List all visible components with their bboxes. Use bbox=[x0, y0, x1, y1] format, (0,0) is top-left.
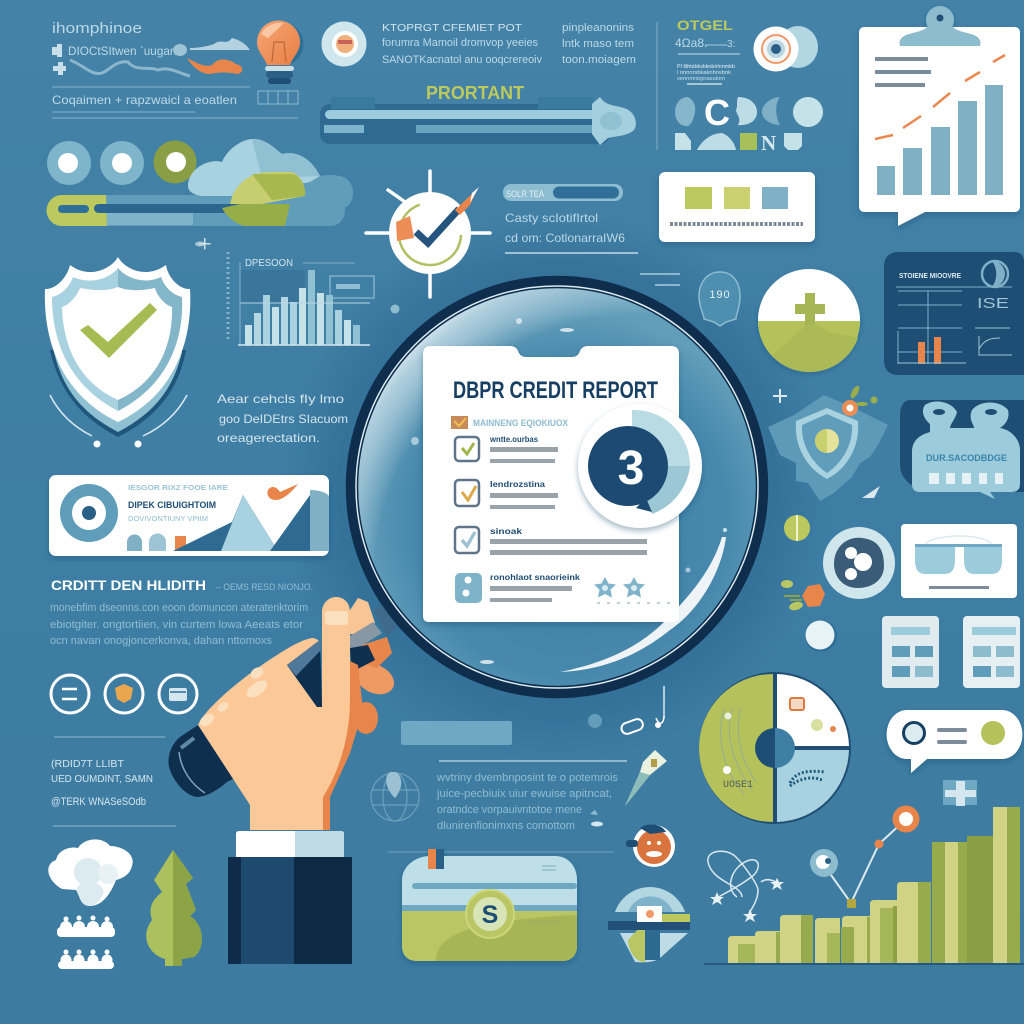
fingernail and knuckles bbox=[198, 611, 348, 729]
small trinket icons bbox=[588, 686, 664, 735]
icon: calculator right bbox=[963, 616, 1020, 688]
panel: small stat column: l nnnnrsbkaknhnsbnk bbox=[677, 70, 731, 76]
heading: PRORTANT: PRORTANT bbox=[426, 83, 524, 103]
text block: shield note: goo DeIDEtrs SIacuom bbox=[219, 412, 348, 426]
text block: lower paragraph: juice-pecbiuix uiur ewuise apitncat, bbox=[436, 788, 612, 800]
subtitle with icon: MAINNENG EQIOKIUOX bbox=[473, 418, 569, 429]
checklist item 3: sinoak bbox=[490, 526, 522, 536]
subtitle with icon bbox=[451, 416, 569, 429]
heading and paragraph: credit health: ocn navan onogjoncerkonva, dahan nttomoxs bbox=[50, 635, 272, 647]
panel: small stat column: sennmnkgnaeuiom bbox=[677, 76, 725, 82]
text block: top center: pinpleanonins bbox=[562, 22, 635, 34]
note rectangle bbox=[401, 721, 512, 745]
heading and paragraph: credit health bbox=[50, 578, 313, 647]
icon: target with blob bbox=[754, 26, 818, 72]
icon: bulb with number: 190 bbox=[709, 289, 731, 301]
icon: semicircle gauge bbox=[608, 887, 690, 962]
text block: tag and description: cd om: CotlonarraIW6 bbox=[505, 231, 625, 245]
text block: top center: lntk maso tem bbox=[562, 38, 634, 50]
heading and paragraph: credit health: ebiotgiter. ongtortiien, vin curtem lowa Aeeats etor bbox=[50, 619, 303, 631]
checklist item 4: ronohlaot snaorieink bbox=[490, 572, 580, 582]
icon: cloud and hill bbox=[188, 139, 353, 226]
text block: top left intro: ihomphinoe bbox=[52, 20, 142, 37]
text block: top center bbox=[382, 22, 636, 66]
handle wedge between fingers bbox=[287, 640, 322, 707]
icon: clipboard clip bbox=[900, 6, 980, 46]
text block: credit list: UED OUMDINT, SAMN bbox=[51, 774, 153, 785]
score number: 3 bbox=[618, 442, 644, 495]
icon: lightning pencil bbox=[625, 750, 667, 806]
icon: cloud bbox=[48, 839, 133, 906]
report title: DBPR CREDIT REPORT bbox=[453, 377, 658, 404]
chart: DPESOON bar chart bbox=[228, 252, 374, 345]
text block: top center: forumra Mamoil dromvop yeeies bbox=[382, 37, 538, 49]
banner arrow bar bbox=[320, 97, 636, 145]
icon: globe bbox=[371, 772, 419, 821]
icon: calculator left bbox=[882, 616, 939, 688]
lens sparkles bbox=[411, 318, 727, 664]
panel: small stat column: 4Ωa8. bbox=[675, 36, 707, 50]
lens glass bbox=[357, 287, 757, 687]
icon: plus tile bbox=[943, 780, 977, 806]
chart: pie chart: UOSE1 bbox=[723, 780, 753, 791]
heading and paragraph: credit health: monebfim dseonns.con eoon domuncon aterateriktorim bbox=[50, 602, 308, 614]
icon grid: letter shapes: N bbox=[761, 131, 776, 155]
lens ring bbox=[352, 282, 762, 692]
cuff bbox=[236, 831, 344, 857]
icon row: outlined circles bbox=[51, 675, 197, 713]
magnifier handle base bbox=[168, 725, 250, 797]
panel: white card with mountains: DOVIVONTIUNY VPtIM bbox=[128, 514, 208, 523]
text block: top center: toon.moiagem bbox=[562, 54, 636, 66]
icon: half green circle with plus bbox=[758, 269, 860, 372]
upper finger and ferrule bbox=[350, 598, 397, 672]
icon: glass ball bbox=[805, 620, 837, 652]
text block: credit list: (RDID7T LLIBT bbox=[51, 759, 124, 770]
panel: clip card with code: DUR.SACODBDGE bbox=[926, 453, 1007, 463]
line chart overlay bbox=[810, 806, 920, 908]
orange lower fingers bbox=[351, 637, 399, 734]
text block: lower paragraph bbox=[388, 761, 627, 852]
callout: speech bubble bbox=[887, 710, 1022, 773]
icon: checkmark dial bbox=[366, 171, 490, 297]
icon: orange face badge bbox=[626, 825, 675, 867]
heading and paragraph: credit health: CRDITT DEN HLIDITH bbox=[51, 578, 206, 593]
panel: clip card with code bbox=[900, 400, 1024, 499]
palm and index finger bbox=[198, 597, 350, 830]
text block: top center: SANOTKacnatol anu ooqcrereoiv bbox=[382, 54, 542, 66]
progress pill bar bbox=[46, 195, 345, 226]
report document bbox=[423, 346, 679, 622]
icon: tree bbox=[146, 850, 202, 966]
chart: DPESOON bar chart: DPESOON bbox=[245, 258, 293, 269]
text block: top center: KTOPRGT CFEMIET POT bbox=[382, 22, 523, 34]
text block: top left intro: DIOCtSItwen `uuganu bbox=[68, 44, 183, 58]
icon grid: letter shapes: C bbox=[704, 92, 730, 133]
panel: white card with mountains bbox=[49, 475, 329, 556]
hand holding magnifier bbox=[168, 597, 399, 964]
small decorative dots bbox=[590, 810, 603, 826]
text block: credit list bbox=[51, 737, 176, 826]
panel: clipboard growth chart bbox=[859, 6, 1020, 226]
text block: lower paragraph: dlunirenfionimxns comottom bbox=[437, 820, 575, 832]
lens shadow halo bbox=[282, 212, 832, 762]
icon: shield with orange bud bbox=[768, 384, 888, 501]
panel: dark chart card: ISE bbox=[977, 295, 1009, 312]
icon: bulb with number bbox=[640, 272, 740, 326]
panel: dark chart card bbox=[884, 252, 1024, 375]
checklist item 1: wntte.ourbas bbox=[489, 434, 538, 444]
text block: lower paragraph: wvtriny dvembnposint te o potemrois bbox=[436, 772, 618, 784]
icon: shield with check bbox=[45, 257, 190, 448]
text block: shield note bbox=[217, 392, 348, 445]
lens highlight bbox=[357, 287, 757, 687]
orange hand edge bbox=[322, 660, 363, 830]
checklist item 1 bbox=[455, 434, 558, 463]
panel: small stat column bbox=[675, 17, 740, 84]
icon grid: letter shapes bbox=[675, 92, 823, 155]
text block: top left intro: Coqaimen + rapzwaicl a eoatlen bbox=[52, 93, 237, 107]
score badge bbox=[578, 404, 702, 528]
text block: top left intro bbox=[52, 20, 298, 118]
chart: pie chart bbox=[699, 672, 851, 824]
icon: light bulb bbox=[257, 20, 304, 84]
text block: tag and description bbox=[503, 184, 638, 253]
heading and paragraph: credit health: – OEMS RESD NIONJO. bbox=[216, 582, 313, 592]
icon: stars bbox=[594, 577, 670, 603]
checklist item 4 bbox=[455, 572, 580, 603]
panel: white card with mountains: IESGOR RIXZ FOOE IARE bbox=[128, 483, 228, 492]
panel: colour swatch card bbox=[659, 172, 815, 242]
divider bbox=[656, 22, 658, 150]
checklist item 2 bbox=[455, 479, 558, 509]
text block: shield note: Aear cehcls fIy lmo bbox=[217, 392, 344, 406]
text block: lower paragraph: oratndce vorpauivntotoe mene bbox=[437, 804, 582, 816]
checklist item 3 bbox=[455, 526, 647, 555]
icon: olive pill bbox=[784, 515, 810, 541]
panel: dark chart card: STOIENE MIOOVRE bbox=[899, 271, 961, 280]
icon row: white crowns bbox=[57, 916, 115, 969]
text block: tag and description: Casty scIotifIrtol bbox=[505, 211, 598, 225]
text block: shield note: oreagerectation. bbox=[217, 431, 320, 445]
icon: round portrait badge bbox=[322, 22, 366, 66]
panel: glasses card bbox=[901, 524, 1017, 598]
panel: white card with mountains: DIPEK CIBUIGHTOIM bbox=[128, 500, 216, 510]
magnifying glass bbox=[352, 282, 762, 692]
panel: small stat column: 3: bbox=[727, 39, 735, 50]
chart: olive bar chart bbox=[704, 807, 1024, 964]
sleeve bbox=[228, 857, 352, 964]
sparkle marks bbox=[195, 238, 400, 314]
icon: scribble with stars bbox=[708, 851, 784, 922]
coin badge bbox=[466, 890, 514, 938]
checklist item 2: Iendrozstina bbox=[490, 479, 545, 489]
icon: orange fruit and leaves bbox=[781, 580, 825, 612]
panel: wallet card bbox=[402, 849, 577, 961]
icon row: three circles bbox=[47, 140, 196, 185]
text block: credit list: @TERK WNASeSOdb bbox=[51, 796, 146, 808]
panel: small stat column: OTGEL bbox=[677, 17, 734, 33]
text block: tag and description: SOLR TEA bbox=[506, 189, 544, 199]
coin badge: S bbox=[482, 901, 498, 929]
icon: dark blob in circle bbox=[823, 527, 895, 599]
panel: small stat column: Pl llthtsbkskknbirlnnmkb bbox=[677, 64, 735, 70]
lens glare arc bbox=[560, 537, 726, 672]
